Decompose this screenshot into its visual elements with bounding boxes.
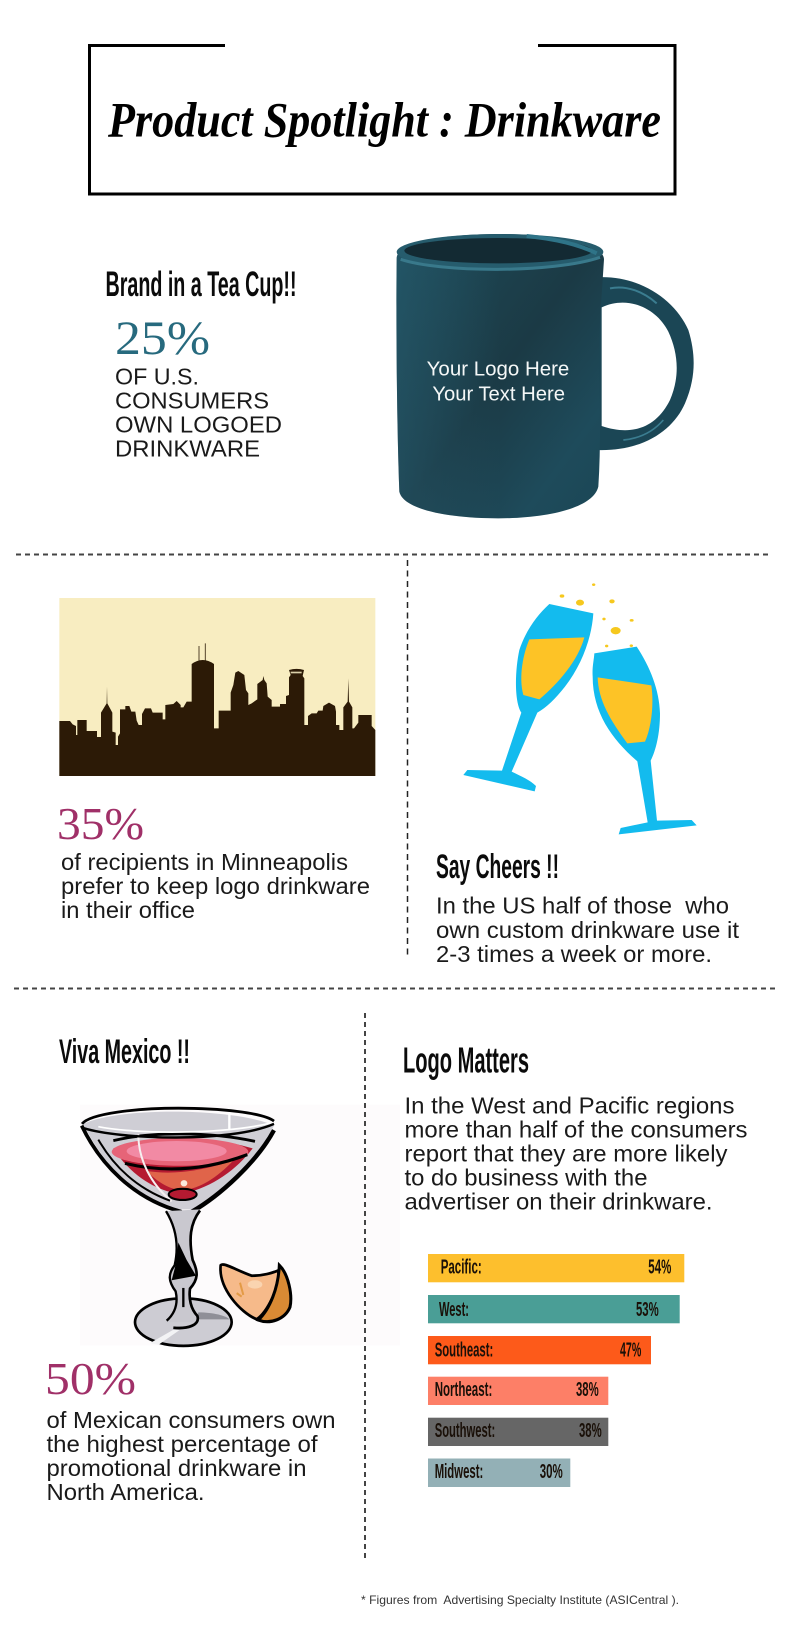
bar: Midwest: Midwest:	[435, 1461, 483, 1483]
icon: Minneapolis skyline	[59, 598, 375, 776]
text: Logo Matters description: more than half of the consumers	[404, 1116, 748, 1142]
bar: Southwest: 38%	[579, 1420, 602, 1442]
text: Logo Matters description: report that they are more likely	[404, 1140, 728, 1166]
bar: Southeast: 47%	[620, 1340, 641, 1362]
stat: 35%: 35%	[57, 798, 144, 849]
title frame	[90, 46, 675, 194]
heading: Logo Matters: Logo Matters	[403, 1040, 529, 1080]
divider 2	[14, 988, 778, 990]
text: cheers description: own custom drinkware use it	[436, 917, 739, 943]
text: Logo Matters description	[404, 1092, 748, 1214]
text: 25% description	[115, 364, 282, 462]
bar: Midwest: 30%	[540, 1461, 563, 1483]
text: Minneapolis description	[61, 849, 370, 923]
divider 1	[16, 554, 769, 556]
text: 25% description: OF U.S.	[115, 364, 199, 390]
mug text: Your Logo Here	[427, 359, 569, 381]
text: Mexico description: of Mexican consumers own	[46, 1407, 336, 1433]
bar: Pacific: 54%	[648, 1256, 671, 1278]
text: Logo Matters description: advertiser on their drinkware.	[404, 1188, 712, 1214]
text: Logo Matters description: to do business with the	[404, 1164, 648, 1190]
text: Minneapolis description: prefer to keep logo drinkware	[61, 873, 370, 899]
mug text: Your Text Here	[432, 383, 565, 405]
bar: West	[428, 1295, 680, 1323]
stat: 50%: 50%	[45, 1354, 136, 1404]
icon: champagne glasses	[463, 583, 697, 834]
mug text	[427, 359, 569, 405]
heading: Brand in a Tea Cup: Brand in a Tea Cup!!	[106, 265, 296, 304]
bar: Pacific	[428, 1254, 684, 1282]
bar: Southwest: Southwest:	[435, 1420, 495, 1442]
bar: Southeast	[428, 1336, 651, 1364]
text: Mexico description: North America.	[46, 1479, 205, 1505]
text: 25% description: OWN LOGOED	[115, 412, 282, 438]
bar: Northeast: Northeast:	[435, 1379, 492, 1401]
heading: Viva Mexico: Viva Mexico !!	[59, 1033, 190, 1071]
bar: West: 53%	[636, 1299, 659, 1321]
title: Product Spotlight : Drinkware	[107, 92, 661, 148]
text: Logo Matters description: In the West and Pacific regions	[404, 1092, 734, 1118]
text: cheers description	[436, 892, 739, 967]
vertical divider bottom section	[364, 1013, 366, 1559]
panel: brand in a tea cup text	[106, 265, 296, 462]
text: Minneapolis description: of recipients in Minneapolis	[61, 849, 348, 875]
text: Mexico description: promotional drinkware in	[46, 1455, 306, 1481]
icon: teal mug	[396, 234, 694, 518]
text: 25% description: DRINKWARE	[115, 436, 260, 462]
text: Minneapolis description: in their office	[61, 897, 195, 923]
bar: Northeast	[428, 1377, 608, 1405]
bar: Midwest	[428, 1458, 570, 1487]
stat: 25%: 25%	[115, 312, 210, 365]
bar: Southeast: Southeast:	[435, 1340, 493, 1362]
bar: Pacific: Pacific:	[441, 1256, 482, 1278]
text: cheers description: 2-3 times a week or more.	[436, 941, 712, 967]
text: Mexico description	[46, 1407, 336, 1505]
bar: Southwest	[428, 1418, 608, 1446]
bar: West: West:	[439, 1299, 469, 1321]
bar: Northeast: 38%	[576, 1379, 599, 1401]
heading: Say Cheers: Say Cheers !!	[436, 848, 559, 886]
footnote: * Figures from Advertising Specialty Institute (ASICentral ).	[361, 1593, 679, 1607]
bar chart: regions	[428, 1254, 684, 1487]
text: cheers description: In the US half of those who	[436, 892, 729, 918]
text: Mexico description: the highest percentage of	[46, 1431, 318, 1457]
icon: cocktail glass with orange	[80, 1105, 400, 1346]
text: 25% description: CONSUMERS	[115, 388, 269, 414]
